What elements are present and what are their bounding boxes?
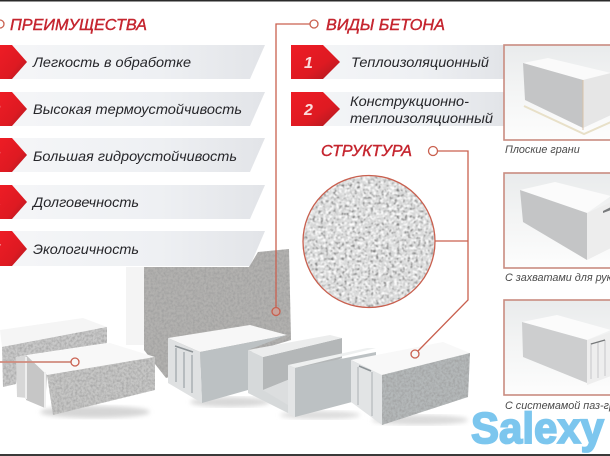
- marker line: structure to block: [411, 146, 468, 358]
- type row 2: Конструкционно-: [350, 93, 469, 109]
- block: front left with grooves: [16, 343, 155, 418]
- gray wall slab: [126, 249, 291, 378]
- advantage row 3: Большая гидроустойчивость: [33, 148, 237, 164]
- panel: block shape thumbnails: [504, 45, 610, 412]
- type row 1: [291, 45, 504, 79]
- caption: hand grips: С захватами для рук: [505, 272, 610, 284]
- callout lines and markers: [0, 20, 468, 366]
- advantage row 1: Легкость в обработке: [32, 54, 191, 70]
- marker line: left block: [0, 358, 79, 366]
- thumbnail: tongue and groove: [504, 300, 610, 395]
- thumbnail: flat faces: [504, 45, 610, 140]
- panel: concrete types: [291, 17, 504, 126]
- advantage row 5: [0, 231, 265, 266]
- structure heading: СТРУКТУРА: [321, 143, 412, 160]
- advantage row 2: [0, 92, 265, 126]
- advantage row 2: Высокая термоустойчивость: [33, 101, 242, 117]
- panel: advantages list: [0, 17, 265, 266]
- watermark: Salexy: Salexy: [471, 404, 604, 453]
- advantage row 3: [0, 138, 265, 172]
- top edge line: [0, 0, 610, 2]
- advantage row 4: Долговечность: [31, 194, 139, 210]
- advantage row 5: Экологичность: [33, 241, 139, 257]
- block: back left: [0, 318, 107, 387]
- type row 2: 2: [303, 102, 313, 119]
- heading: advantages: ПРЕИМУЩЕСТВА: [10, 17, 147, 34]
- type row 2: теплоизоляционный: [350, 110, 493, 126]
- marker line: types to slab: [272, 20, 318, 316]
- heading: concrete types: ВИДЫ БЕТОНА: [326, 17, 445, 34]
- thumbnail: hand grips: [504, 173, 610, 268]
- block: front right with tongue and groove: [351, 342, 470, 425]
- advantage row 4: [0, 185, 265, 219]
- block: U-shaped: [248, 335, 376, 419]
- advantage row 1: [0, 45, 265, 79]
- marker: advantages: [0, 20, 4, 28]
- block: center with tongue and groove: [168, 325, 287, 407]
- type row 2: [291, 92, 504, 126]
- type row 1: 1: [304, 55, 313, 72]
- type row 1: Теплоизоляционный: [351, 54, 489, 70]
- bottom edge line: [0, 454, 610, 456]
- structure texture circle: [303, 175, 435, 308]
- caption: flat faces: Плоские грани: [505, 144, 580, 156]
